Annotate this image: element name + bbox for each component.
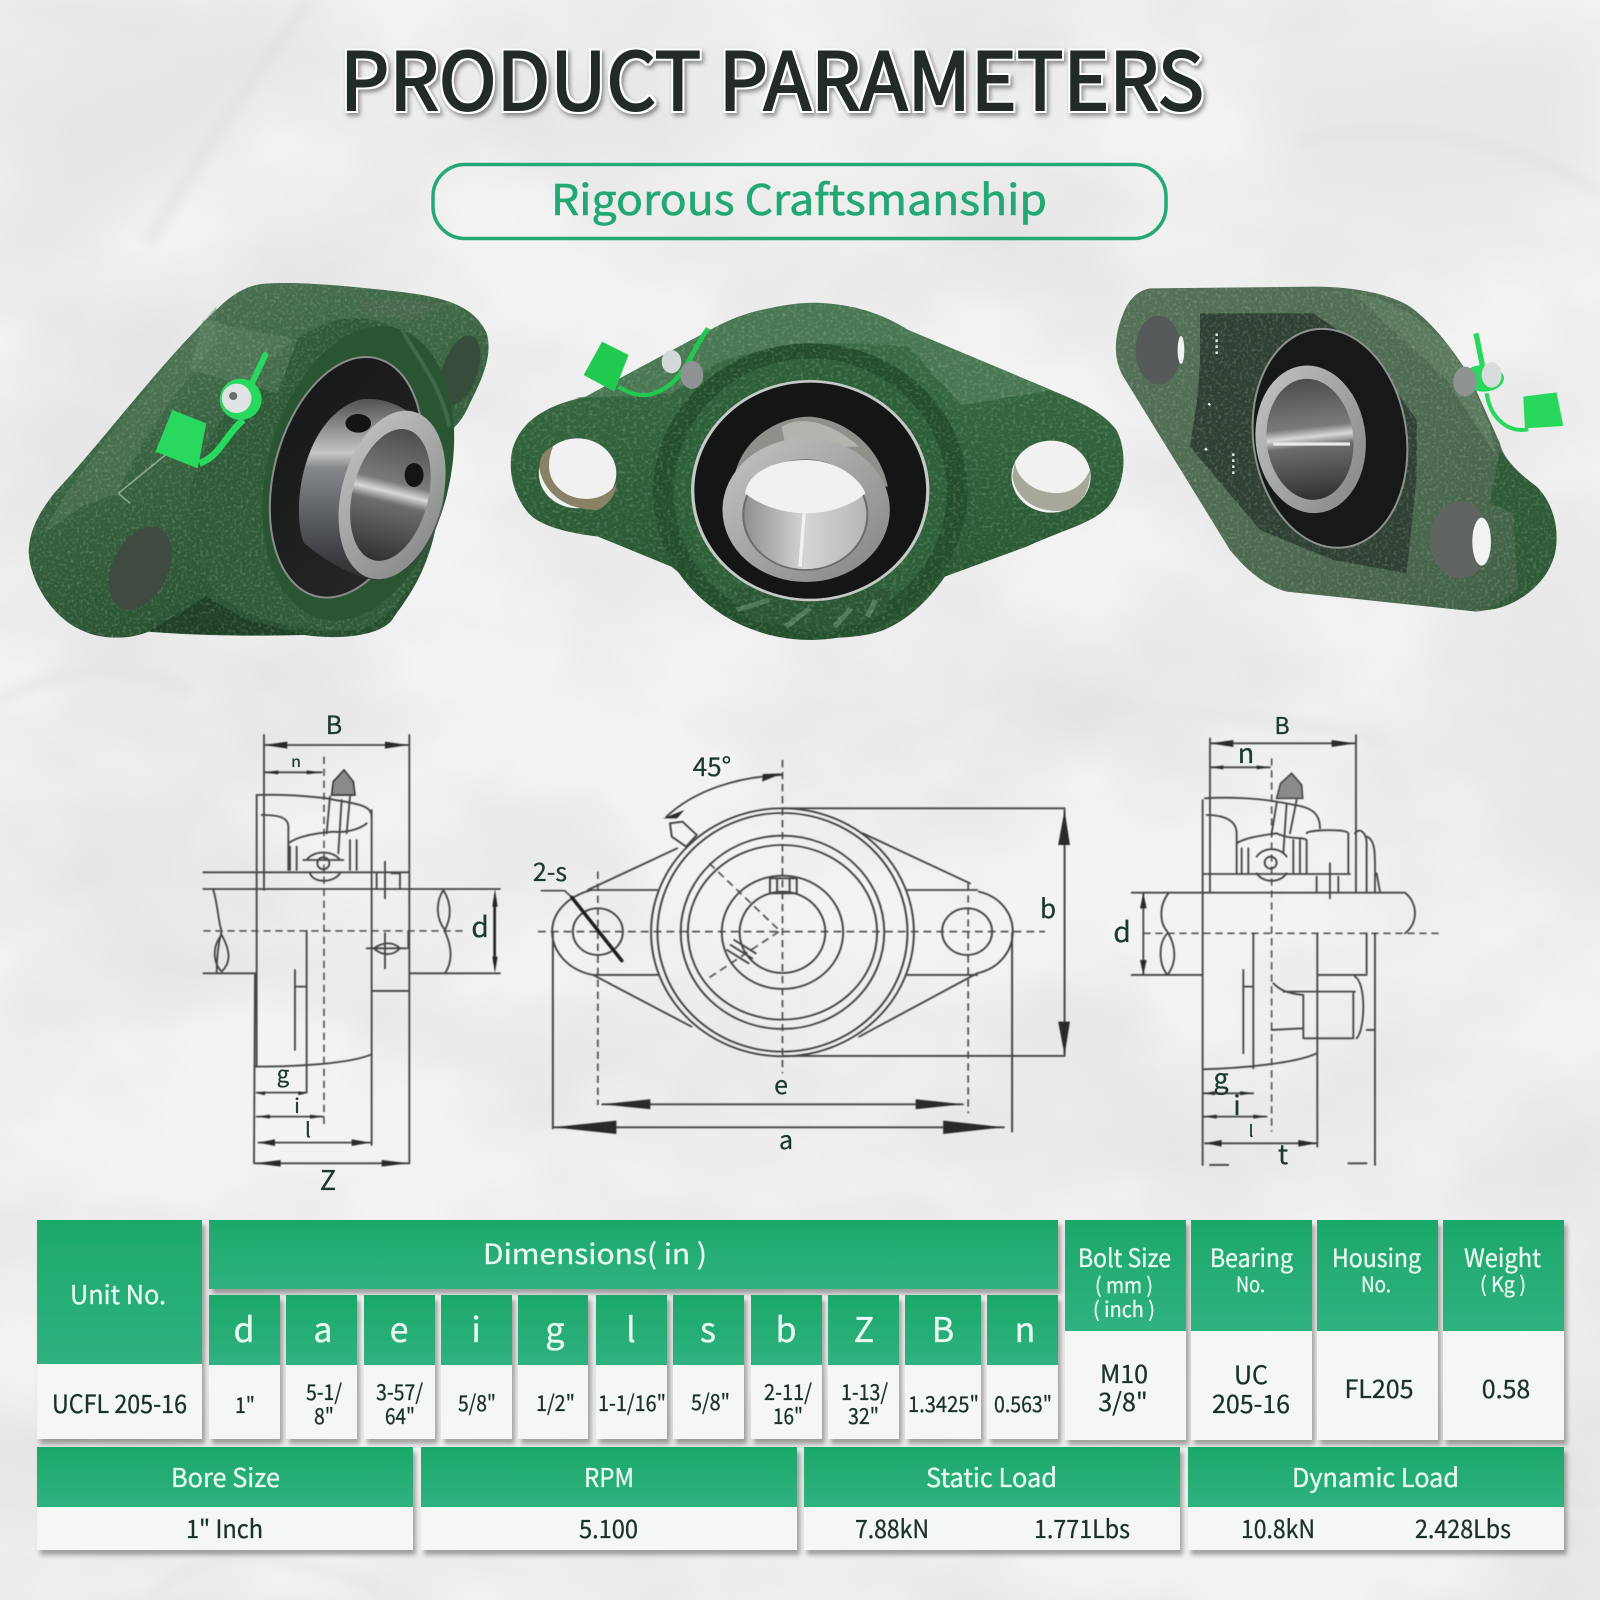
table headers: a — [313, 1303, 333, 1352]
table headers: Z — [854, 1303, 874, 1352]
load table headers — [171, 1458, 1459, 1495]
labels: left side view — [277, 706, 489, 1198]
table values: 1-13/ — [841, 1375, 888, 1407]
mounting holes — [1136, 316, 1181, 384]
labels: left side view: d — [471, 906, 489, 946]
hole right — [432, 330, 488, 410]
table values: 8" — [314, 1399, 334, 1431]
table values: 5/8" — [691, 1385, 730, 1417]
table headers: No. — [1236, 1269, 1265, 1299]
table headers: No. — [1361, 1269, 1391, 1299]
table headers: Bolt Size — [1078, 1239, 1171, 1275]
labels: left side view: g — [277, 1057, 290, 1089]
table values: 0.58 — [1482, 1370, 1530, 1406]
collar — [722, 438, 890, 582]
table headers: b — [775, 1303, 797, 1352]
labels: left side view: Z — [320, 1159, 336, 1198]
table values: UCFL 205-16 — [52, 1385, 187, 1421]
table headers: Bearing — [1210, 1239, 1293, 1275]
labels: front view: 2-s — [533, 853, 567, 889]
table values — [52, 1355, 1530, 1431]
labels: left side view: i — [294, 1090, 300, 1119]
table values: 16" — [773, 1399, 803, 1431]
table values: 64" — [385, 1399, 415, 1431]
table values: 5-1/ — [306, 1375, 342, 1407]
table values: 5/8" — [458, 1386, 496, 1418]
load table values — [186, 1510, 1511, 1546]
table values: 32" — [848, 1399, 879, 1431]
labels: left side view: B — [326, 706, 342, 742]
load table headers: RPM — [584, 1458, 634, 1495]
seal — [1239, 319, 1421, 558]
table values: UC — [1234, 1356, 1268, 1392]
table headers: ( Kg ) — [1480, 1269, 1526, 1299]
diagram: side view left — [203, 706, 500, 1198]
grease fitting — [332, 770, 355, 795]
labels: front view: b — [1040, 889, 1056, 926]
casting text band — [729, 588, 892, 634]
collar bore — [1248, 360, 1373, 519]
table headers: Unit No. — [70, 1275, 166, 1312]
labels: front view: e — [774, 1066, 788, 1102]
load and speed table — [37, 1447, 1564, 1550]
barrel — [733, 417, 888, 487]
photo: bearing rear view — [1116, 287, 1563, 612]
load table values: 10.8kN — [1241, 1510, 1315, 1546]
subtitle pill: Rigorous Craftsmanship — [551, 167, 1047, 228]
table values: 2-11/ — [764, 1375, 812, 1407]
table values: 1" — [235, 1388, 255, 1420]
labels: right side view: t — [1278, 1133, 1288, 1172]
rear recess — [1190, 313, 1417, 573]
table values: M10 — [1100, 1355, 1148, 1391]
labels: right side view — [1113, 707, 1290, 1172]
table headers — [70, 1233, 1542, 1352]
load table values: 7.88kN — [855, 1510, 929, 1546]
load table headers: Bore Size — [171, 1458, 280, 1495]
load table headers: Static Load — [926, 1458, 1057, 1495]
subtitle pill — [433, 164, 1166, 238]
labels: left side view: n — [291, 748, 301, 772]
labels: right side view: n — [1238, 732, 1254, 771]
table values: 205-16 — [1212, 1385, 1290, 1421]
hole left — [96, 517, 184, 620]
table headers: ( mm ) — [1095, 1270, 1153, 1300]
table headers: Housing — [1332, 1239, 1421, 1275]
table headers: l — [626, 1303, 636, 1352]
load table values: 5.100 — [579, 1510, 638, 1546]
labels: right side view: g — [1213, 1057, 1229, 1096]
photo: bearing centre view — [511, 303, 1124, 640]
load table values: 1" Inch — [186, 1510, 263, 1546]
diagram: side view right — [1113, 707, 1442, 1172]
labels: right side view: l — [1249, 1118, 1253, 1142]
black seal — [246, 341, 447, 614]
diagram: front view centre — [533, 747, 1070, 1157]
table values: 3/8" — [1098, 1383, 1148, 1419]
table values: 3-57/ — [376, 1375, 423, 1407]
labels: right side view: i — [1233, 1084, 1241, 1123]
labels: right side view: B — [1274, 707, 1290, 741]
photo: bearing left view — [29, 283, 489, 641]
grease cap — [1523, 392, 1563, 428]
labels: front view — [533, 747, 1056, 1157]
shaft collar — [299, 399, 445, 580]
grease fitting — [1277, 773, 1303, 798]
table headers: n — [1015, 1303, 1035, 1352]
title: PRODUCT PARAMETERS — [340, 18, 1204, 134]
table values: FL205 — [1344, 1370, 1414, 1406]
table headers: ( inch ) — [1093, 1294, 1155, 1324]
housing ring — [653, 343, 967, 640]
mounting holes — [539, 438, 616, 508]
table values: 0.563" — [994, 1387, 1052, 1419]
load table headers: Dynamic Load — [1292, 1458, 1459, 1495]
table headers: d — [233, 1303, 255, 1352]
table headers: B — [932, 1303, 954, 1352]
labels: front view: 45° — [693, 747, 731, 784]
table headers: Dimensions( in ) — [483, 1233, 707, 1273]
table headers: g — [545, 1303, 565, 1352]
table values: 1/2" — [536, 1386, 575, 1418]
load table values: 1.771Lbs — [1034, 1510, 1130, 1546]
table values: 1.3425" — [908, 1387, 979, 1419]
grease cap — [155, 410, 206, 468]
specification table — [37, 1220, 1564, 1440]
load table values: 2.428Lbs — [1415, 1510, 1511, 1546]
housing ring — [233, 306, 484, 641]
table headers: Weight — [1464, 1239, 1542, 1275]
table headers: i — [471, 1303, 481, 1352]
table headers: e — [390, 1303, 408, 1352]
labels: front view: a — [779, 1121, 793, 1157]
table values: 1-1/16" — [598, 1386, 666, 1418]
grease cap — [584, 342, 629, 392]
seal — [693, 381, 928, 600]
labels: right side view: d — [1113, 911, 1131, 951]
table headers: s — [700, 1303, 716, 1352]
labels: left side view: l — [305, 1114, 311, 1143]
